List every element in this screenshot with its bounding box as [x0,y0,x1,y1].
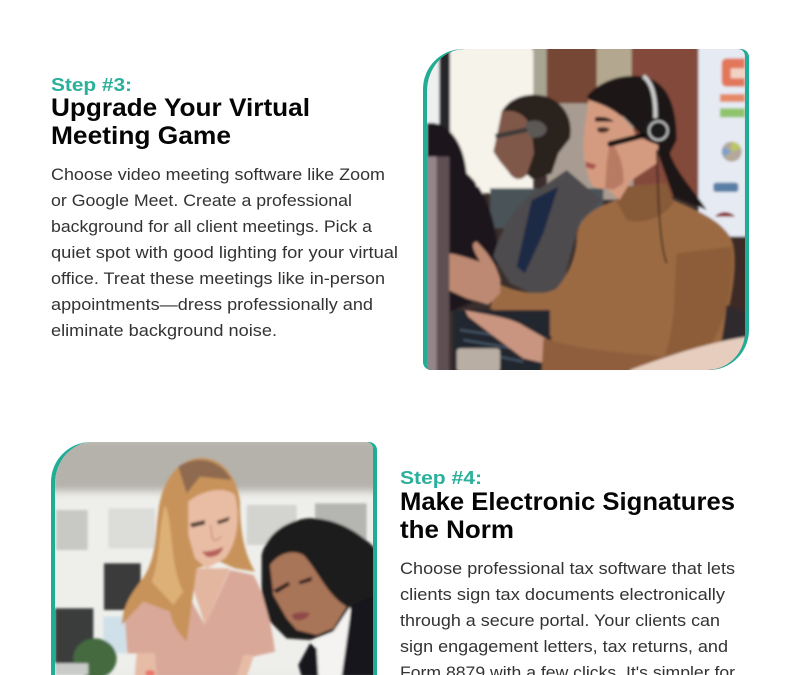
chair and foreground sleeve [724,304,745,339]
heading: step 3: Meeting Game [51,122,231,150]
blonde face [188,490,238,568]
blonde hair [122,458,255,642]
body text: step 3: eliminate background noise. [51,322,277,340]
heading: step 3 [51,94,310,150]
far hand [447,242,501,305]
photo: woman with headset at computer [423,47,749,373]
body text: step 3: office. Treat these meetings like in-person [51,270,385,288]
body text: step 4: Choose professional tax software that lets [400,560,735,578]
dark haired woman [262,518,377,640]
screen graphics [722,58,745,87]
hair and ponytail [587,76,707,210]
paper detail [145,670,155,675]
step label: step 4: Step #4: [400,468,482,488]
heading: step 4: the Norm [400,516,514,544]
heading: step 3: Upgrade Your Virtual [51,94,310,122]
section: step 3 text [51,75,398,340]
body text: step 3: quiet spot with good lighting for your virtual [51,244,398,262]
woman face [584,100,658,200]
body text: step 4: through a secure portal. Your clients can [400,612,720,630]
body text: step 3: background for all client meetings. Pick a [51,218,373,236]
man [493,170,602,307]
body text: step 3: appointments—dress professionally and [51,296,373,314]
headset [643,76,655,120]
section: step 4 text [400,468,736,675]
photo: two women reviewing documents [50,438,380,675]
left person [427,123,498,313]
heading: step 4 [400,488,735,544]
body text: step 4: clients sign tax documents electronically [400,586,726,604]
body text: step 3: Choose video meeting software like Zoom [51,166,385,184]
white shirt and black blazer [315,607,350,675]
body text: step 4 [400,560,736,675]
body text: step 3: or Google Meet. Create a professional [51,192,352,210]
heading: step 4: Make Electronic Signatures [400,488,735,516]
body text: step 4: sign engagement letters, tax returns, and [400,638,728,656]
pink top [125,570,275,675]
near hand [465,310,548,363]
step label: step 3: Step #3: [51,75,132,95]
woman sweater [488,197,736,358]
body text: step 3 [51,166,398,340]
monitor and keyboard [453,310,550,373]
